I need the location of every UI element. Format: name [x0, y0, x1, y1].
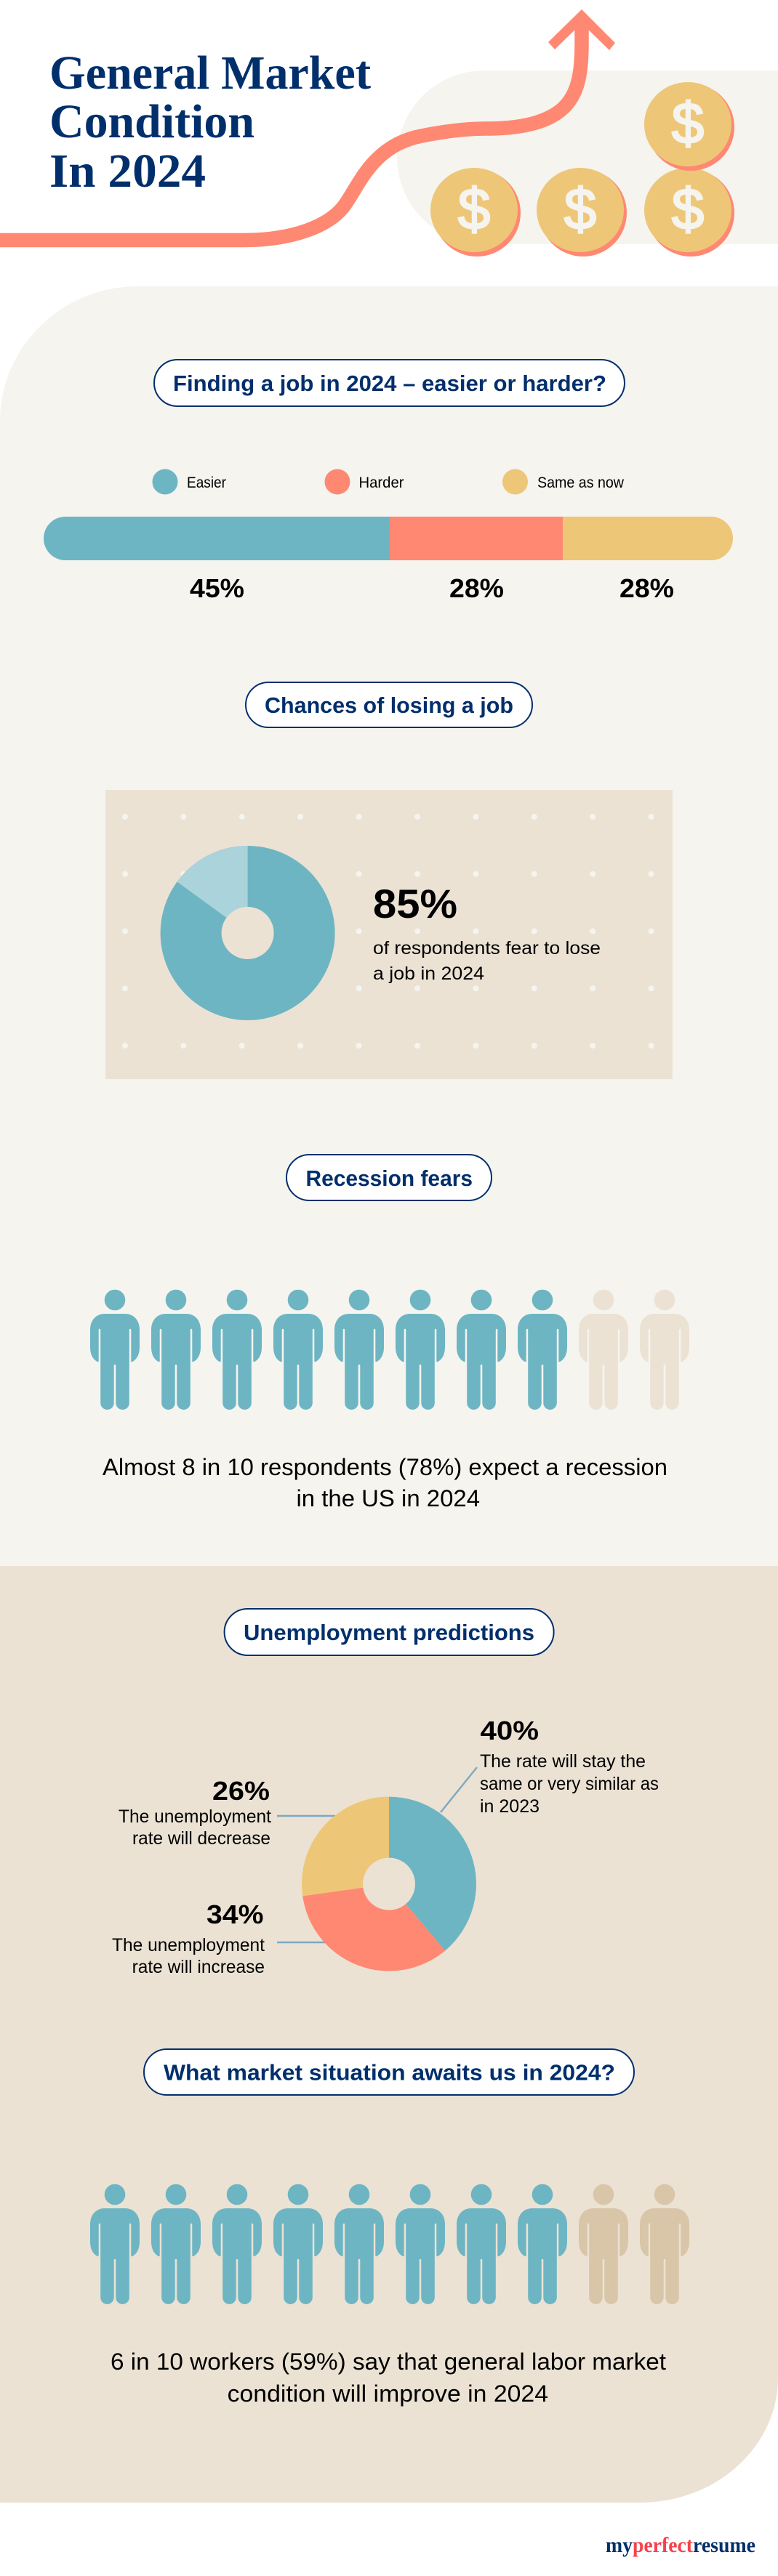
callout: 34%: [112, 1899, 265, 1977]
legend item: harder: Harder: [359, 475, 404, 491]
heading: chances of losing a job: [246, 682, 532, 727]
icon: coin 4: [644, 82, 734, 171]
heading: market situation: What market situation awaits us in 2024?: [164, 2060, 615, 2086]
icon row: 8 of 10 people (market): [90, 2184, 689, 2304]
heading: unemployment predictions: Unemployment predictions: [244, 1620, 534, 1645]
callout: 26%: rate will decrease: [132, 1828, 270, 1849]
panel: job loss fear: [105, 790, 673, 1079]
panel: cream section: [0, 286, 778, 1566]
callout: 40%: in 2023: [480, 1796, 540, 1817]
bar values: [190, 573, 674, 603]
heading: unemployment predictions: [225, 1609, 554, 1655]
header background shape: [397, 70, 778, 244]
icon: coin 2: $: [564, 177, 596, 241]
panel: beige section: [0, 1566, 778, 2503]
callout: 40%: The rate will stay the: [480, 1751, 646, 1772]
legend item: easier: [153, 469, 226, 494]
callout: 34%: The unemployment: [112, 1935, 265, 1955]
callout: 26%: 26%: [212, 1776, 270, 1806]
leader lines: [277, 1767, 477, 1942]
icon row: 8 of 10 people: [90, 1290, 689, 1410]
legend item: same as now: [502, 469, 625, 494]
text: market statistic: [111, 2349, 666, 2407]
callout: 40%: 40%: [480, 1716, 539, 1745]
heading: chances of losing a job: Chances of losing a job: [265, 693, 513, 718]
title: In 2024: [49, 145, 206, 198]
callout: 40%: same or very similar as: [480, 1774, 659, 1794]
callout: 34%: 34%: [206, 1899, 263, 1929]
title: [49, 47, 371, 198]
bar values: 28%: [619, 573, 674, 603]
donut chart: 85%: [161, 846, 335, 1020]
stat description: of respondents fear to lose: [373, 938, 601, 958]
title: Condition: [49, 95, 254, 148]
icon: coin 3: [644, 168, 734, 257]
stat: 85%: 85%: [373, 881, 457, 926]
donut chart: unemployment: [302, 1797, 476, 1971]
callout: 26%: The unemployment: [119, 1806, 271, 1827]
legend item: same as now: Same as now: [537, 475, 625, 491]
text: recession statistic: Almost 8 in 10 respondents (78%) expect a recession: [103, 1454, 667, 1480]
heading: market situation: [144, 2049, 634, 2095]
bar values: 45%: [190, 573, 244, 603]
icon: coin 2: [537, 168, 627, 257]
legend: [153, 469, 625, 494]
logo: my: [606, 2533, 633, 2557]
icon: coin 4: $: [672, 91, 704, 156]
legend item: harder: [324, 469, 404, 494]
callout: 40%: [480, 1716, 659, 1817]
icon: coin 1: [430, 168, 521, 257]
callout: 26%: [119, 1776, 271, 1849]
logo: perfect: [633, 2533, 693, 2557]
heading: finding a job: Finding a job in 2024 – easier or harder?: [173, 371, 606, 396]
logo: [606, 2533, 755, 2557]
text: recession statistic: [103, 1454, 667, 1511]
heading: recession fears: Recession fears: [305, 1166, 473, 1191]
text: market statistic: 6 in 10 workers (59%) say that general labor market: [111, 2349, 666, 2375]
heading: recession fears: [286, 1155, 492, 1200]
arrow: rising trend: [0, 9, 615, 240]
stat description: [373, 938, 601, 984]
icon: coin 3: $: [672, 177, 704, 241]
text: recession statistic: in the US in 2024: [297, 1485, 480, 1511]
heading: finding a job: [154, 360, 625, 406]
bar values: 28%: [449, 573, 504, 603]
logo: resume: [693, 2533, 755, 2557]
icon: coin 1: $: [458, 177, 490, 241]
legend item: easier: Easier: [187, 475, 226, 491]
icon: coins: [430, 82, 734, 257]
text: market statistic: condition will improve in 2024: [228, 2381, 548, 2407]
callout: 34%: rate will increase: [132, 1957, 265, 1977]
stacked bar chart: [44, 517, 733, 560]
title: General Market: [49, 47, 371, 100]
stat description: a job in 2024: [373, 964, 484, 984]
